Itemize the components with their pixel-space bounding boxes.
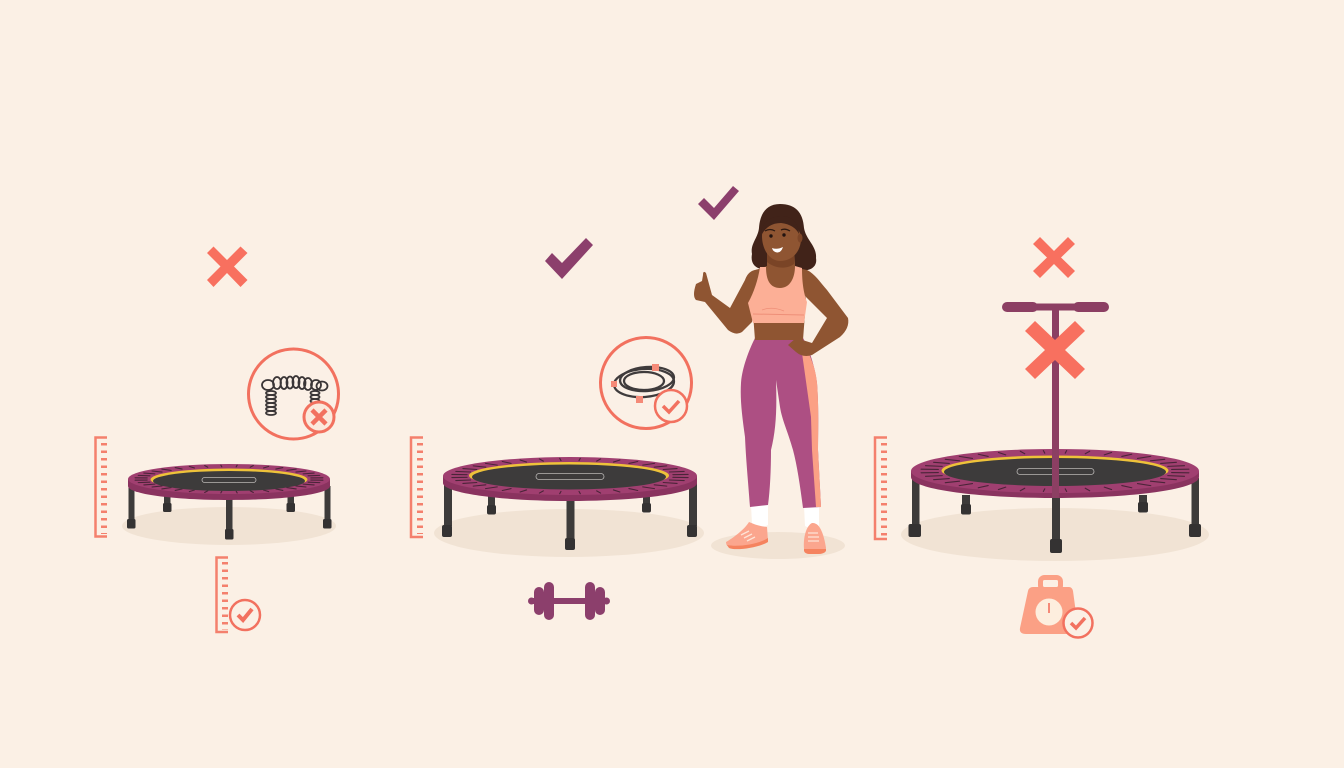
- left arm and fist: [694, 269, 760, 334]
- ruler with check: compact height: [216, 558, 260, 632]
- icon: weak spring in circle: [248, 349, 338, 439]
- icon: bungee cords in circle: [600, 338, 692, 428]
- dumbbell icon: [528, 582, 610, 620]
- ruler: small trampoline height: [96, 438, 107, 536]
- right arm: [788, 268, 848, 356]
- hair fringe: [761, 216, 799, 236]
- leggings: [741, 338, 821, 508]
- eyes, brows and smile: [765, 229, 790, 253]
- check mark: woman: [698, 186, 739, 220]
- sports top: [748, 266, 807, 323]
- small cross mark: right: [1033, 237, 1075, 278]
- neck shadow under chin: [767, 252, 794, 268]
- face: [762, 222, 801, 261]
- ruler: large trampoline height: [875, 438, 887, 539]
- socks: [751, 505, 819, 528]
- shoes: [726, 522, 768, 548]
- ruler: medium trampoline height: [411, 438, 423, 537]
- large trampoline with handle bar: [901, 302, 1209, 561]
- large cross mark: [1025, 321, 1085, 379]
- hair: [752, 204, 816, 271]
- icon: weight with stopwatch and check: [1020, 578, 1092, 638]
- medium trampoline: [434, 457, 704, 557]
- check mark: middle trampoline: [545, 238, 593, 279]
- ear: [798, 234, 802, 242]
- leggings stripe: [802, 350, 821, 507]
- shoe laces: [741, 531, 819, 541]
- small trampoline: [122, 464, 336, 545]
- small cross mark: left: [207, 246, 248, 287]
- floor shadow: [711, 532, 845, 559]
- neck and torso: [752, 250, 806, 340]
- woman with thumbs up: [694, 204, 848, 559]
- handle bar: [1002, 302, 1109, 498]
